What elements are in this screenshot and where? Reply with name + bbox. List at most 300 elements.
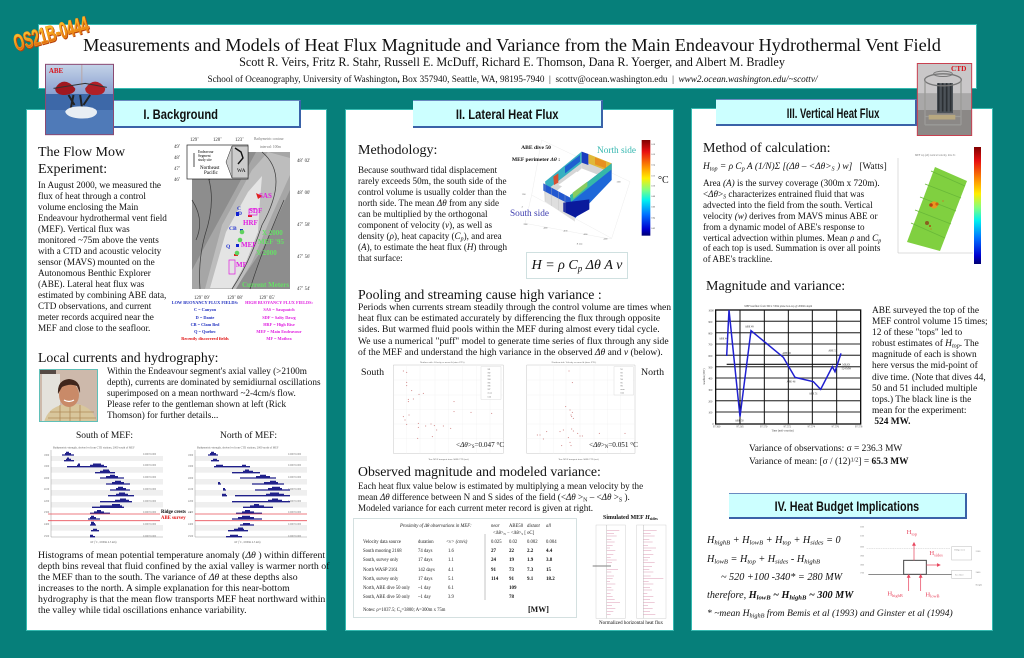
map axis labels: 129˚ 05' [259,295,275,301]
chart: depth histograms south and north: 2400 [44,523,50,526]
table: heat flux estimates [353,518,577,618]
text: flow mow description: meter records acquired near the [38,312,154,322]
text: histograms description: depth bins reveal that fluid confined by the axial valley is warmer north of [38,561,329,572]
map axis labels [174,137,310,301]
table: heat flux estimates: Proximity of Δθ observations in MEF: [399,524,472,529]
text: method description: <Δθ>S characterizes entrained fluid that was [703,189,864,200]
chart: scatter plots south and north [393,361,636,461]
text: method description: velocity (w) derives from MAVS minus ABE or [703,211,877,221]
chart: heat flux by dive: ABE 50 [735,419,744,422]
legend: vent field names: D = Dante [196,315,214,320]
text: magnitude description: ABE surveyed the top of the [872,306,979,316]
chart: scatter plots south and north: True MVE transport from ABM/CTD (m/s) [428,458,469,461]
chart: depth histograms south and north: 0.000±0.000 [143,488,157,491]
map inset: Northwest Pacific: Segment [198,154,211,158]
map: Endeavour segment bathymetry [174,137,310,301]
chart: 3D perimeter temperature: 3900 [523,224,527,226]
text: method description: advected into the field from the south. Vertical [703,200,873,210]
formula box: lateral heat flux [526,252,628,279]
diagram: heat budget schematic: 2200 [860,527,864,529]
text: histograms description: increases to the north. A simple explanation for this near-bottom [38,583,290,594]
table: heat flux estimates: 109 [509,586,517,591]
chart: 3D perimeter temperature: 4200 [583,234,587,236]
table: heat flux estimates: 0.002 [527,540,538,545]
heading: simulated MEF H sides: Simulated MEF Hsides [603,515,658,521]
text: flow mow description: (MEF). Vertical flux was [38,224,130,234]
text: magnitude description [872,306,988,427]
text: magnitude description: 12 of these "tops" led to [872,328,962,338]
legend: vent field names: Recently discovered fields [181,336,229,341]
legend: vent field names: HRF = High Rise [263,322,295,327]
table: heat flux estimates: 91 [509,577,514,582]
chart: depth histograms south and north: 1800 [188,454,194,457]
table: heat flux estimates: 74 days [418,549,433,554]
chart: heat flux by dive: 600 [708,355,713,358]
map inset: Northwest Pacific: Pacific [204,171,219,176]
flux labels: sides [934,552,943,557]
legend: vent field names: MF = Mothra [266,336,292,341]
table: heat flux estimates: South, ABE dive 50 only [363,595,411,600]
table: heat flux estimates: North WASP 2161 [363,568,399,573]
text: flow mow description: Endeavour hydrothermal vent field [38,213,167,223]
chart: heat flux by dive: Time (mid- yearday) [772,430,794,433]
table: heat flux estimates: 1.6 [448,549,455,554]
text: flow mow description: CTD observations, and current [38,301,151,311]
text: flow mow description: monitored ~75m above the vents [38,235,159,245]
map axis labels: 129˚ [190,137,199,143]
table: heat flux estimates: 142 days [418,568,435,573]
text: magnitude description: robust estimates of Htop. The [872,339,979,350]
chart: depth histograms south and north: 0.000±0.000 [288,535,302,538]
diagram: heat budget schematic: 2000 [860,546,864,548]
table: heat flux estimates: 73 [509,568,514,573]
table: heat flux estimates: 91 [491,568,496,573]
table: heat flux estimates: 15 [546,568,552,573]
table: heat flux estimates: 78 [509,595,514,600]
map: Endeavour segment bathymetry: MEF '95 [258,238,284,246]
table: heat flux estimates: 9.1 [527,577,534,582]
text: methodology description: can be multiplied by the orthogonal [358,209,488,219]
table: heat flux estimates: 3.9 [448,595,455,600]
map: Endeavour segment bathymetry: CB [229,226,237,232]
chart: heat flux by dive: 97.572 [784,426,792,429]
chart: heat flux by dive: 200 [708,400,713,403]
chart: depth histograms south and north: 0.000±0.000 [288,488,302,491]
text: methodology description: density (ρ), heat capacity (Cp), and area [358,231,502,242]
chart: heat flux by dive: 524 MW [842,368,852,371]
chart: depth histograms south and north: 1800 [44,454,50,457]
photo: CTD rosette: CTD [951,64,966,73]
map labels: vent fields: SDF [249,207,262,215]
chart: 3D perimeter temperature: 1700 [522,194,526,196]
formula: numeric estimate: ~ 520 +100 -340* = 280 MW [721,572,842,583]
legend: vent field names: SAS = Sasquatch [263,307,295,312]
table: heat flux estimates: [MW] [528,605,549,614]
map axis labels: 48˚ [174,155,181,161]
map axis labels: 129˚ 08' [227,295,243,301]
text: magnitude description: 50 and 51 included multiple [872,384,977,394]
chart: 3D perimeter temperature: 0.10 [651,186,655,188]
text: methodology description: control volume is usually colder than the [358,187,506,197]
chart: heat flux by dive: ABE 53 [828,350,838,353]
chart: depth histograms south and north: 2000 [188,477,194,480]
table: heat flux estimates: South, survey only [363,558,399,563]
chart: heat flux by dive: MEAN [842,363,850,366]
map axis labels: 49˚ [174,144,181,150]
map: Endeavour segment bathymetry: C [237,206,241,212]
chart: depth histograms south and north: 2400 [188,523,194,526]
heading: III. Vertical Heat Flux [716,99,917,126]
map axis labels: 129˚ 09' [194,295,210,301]
label: south of MEF: South of MEF: [76,431,133,441]
chart: depth histograms south and north: 0.000±0.000 [288,464,302,467]
chart: heat flux by dive: 97.576 [832,426,840,429]
text: flow mow description: volume enclosing the Main [38,202,138,212]
table: heat flux estimates: 17 days [418,577,433,582]
photo: CTD rosette [916,63,972,136]
label: North: North [641,367,664,378]
text: magnitude description: dive time. (Note that dives 44, [872,373,986,383]
heading: local currents: Local currents and hydrography: [38,350,218,365]
map axis labels: 47˚ 54' [297,286,310,292]
table: heat flux estimates: ~1 day [418,595,431,600]
chart: heat flux by dive: 97.565 [736,426,744,429]
chart: depth histograms south and north: 0.000±0.000 [288,511,302,514]
table: heat flux estimates: − <Δθ> [506,531,522,536]
chart: scatter plots south and north: M1 [488,369,490,371]
diagram: heat budget schematic: 1900 [860,556,864,558]
flux labels: H [929,550,934,557]
chart: simulated flux time series [592,524,666,618]
chart: heat flux by dive: ABE 49 [745,325,754,328]
heading: magnitude and variance: Magnitude and variance: [706,279,845,294]
arrows: fluxes [907,543,940,591]
formula: vertical heat flux: Htop = ρ Cp A (1/N)Σ [(Δθ – <Δθ>S ) w] [Watts] [703,162,887,173]
text: histograms description: hydrography is that the mean flow transports MEF heat northward within [38,594,325,605]
legend: vent field names [172,300,313,341]
table: heat flux estimates: p [400,609,402,613]
chart: scatter plots south and north: N1 [620,369,623,371]
photo: Rick Thomson portrait [39,369,98,422]
table: heat flux estimates: [ oC] [523,531,535,536]
chart: scatter plots south and north: M2 [488,372,490,374]
map labels: vent fields: MEF [241,241,257,249]
chart: scatter plots south and north: total [488,396,492,398]
map: Endeavour segment bathymetry: Q [226,244,231,250]
chart: heat flux by dive: ABE 45 [782,352,792,355]
legend: vent field names: CB = Clam Bed [191,322,219,327]
heading: flow mow experiment [38,145,126,177]
chart: heat flux by dive: 100 [708,412,713,415]
chart: scatter plots south and north: Northern side: Velocity vs mean ∆t (since ETA) [552,361,596,364]
chart: 3D perimeter temperature: 0.14 [651,165,655,167]
text: local currents description: Please refer to the gentleman shown at left (Rick [107,399,286,409]
chart: heat flux by dive: 0 [712,423,714,426]
text: pooling description: sides. But warmed fluid pools within the MEF during almost every tidal cycle. [358,324,660,335]
text: flow mow description: Autonomous Benthic Explorer [38,268,151,278]
text: method description: from a dynamic model of ABE's response to [703,222,865,232]
text: pooling description: of the MEF and understand the high variance in the observed Δθ and v (below). [358,347,663,358]
table: heat flux estimates: 22 [509,549,514,554]
chart: scatter plots south and north: True MVE transport from ABM/CTD (m/s) [558,458,599,461]
map inset: Northwest Pacific: Northeast [200,166,220,171]
heading: IV. Heat Budget Implications: IV. Heat Budget Implications [775,498,919,514]
chart: heat flux by dive: 400 [708,378,713,381]
label: north of MEF: North of MEF: [220,431,277,441]
text: magnitude description: here versus the mid-point of [872,361,978,371]
table: heat flux estimates: 0.004 [546,540,557,545]
chart: heat flux by dive: 1000 [708,310,714,313]
map: Endeavour segment bathymetry: Current Meters [242,281,289,289]
formula: low buoyancy flux: HlowB = Htop + Hsides - HhighB [707,554,820,566]
map: Endeavour segment bathymetry: D [238,211,242,217]
chart: 3D perimeter temperature [522,140,655,245]
chart: depth histograms south and north: 0.000±0.000 [143,500,157,503]
text: histograms description: Histograms of mean potential temperature anomaly (Δθ ) within different [38,550,325,561]
chart: scatter plots south and north: Northern side: Velocity vs mean ∆t (since ETA) [420,361,465,364]
heading: pooling and streaming: Pooling and streaming cause high variance : [358,287,602,302]
authors: Scott R. Veirs, Fritz R. Stahr, Russell E. McDuff, Richard E. Thomson, Dana R. Yoerger, and Albert M. Bradley [239,55,785,69]
heading: observed magnitude: Observed magnitude and modeled variance: [358,464,601,479]
map axis labels: Bathymetric contour [254,137,284,141]
chart: 3D perimeter temperature: 3300 [617,182,621,184]
table: heat flux estimates: 1.1 [448,558,455,563]
chart: heat flux by dive: ABE 46 [787,381,796,384]
table: heat flux estimates: 5.1 [448,577,455,582]
chart: depth histograms south and north: 0.000±0.000 [143,476,157,479]
chart: 3D perimeter temperature: 4100 [563,231,567,233]
flux labels: top [911,531,917,536]
table: heat flux estimates: =3800; A=300m x 75m [401,608,446,613]
table: heat flux estimates: North, survey only [363,577,399,582]
text: methodology description [358,165,507,263]
text: local currents description: depth), currents are dominated by semidiurnal oscillations [107,377,321,387]
chart: 3D perimeter temperature: 0.02 [651,228,655,230]
table: heat flux estimates: N [504,532,507,536]
chart: scatter plots south and north: N3 [620,376,623,378]
map inset: Northwest Pacific [187,145,248,179]
text: flow mow description: with a CTD and acoustic velocity [38,246,161,256]
map labels: vent fields [236,192,272,269]
map labels: vent fields: MF [236,261,247,269]
map axis labels: 123˚ [235,137,244,143]
table: heat flux estimates: 27 [491,549,496,554]
chart: depth histograms south and north: 2300 [44,511,50,514]
text: methodology description: Because southward tidal displacement [358,165,497,175]
chart: 3D perimeter temperature: 0.12 [651,175,655,177]
map labels: vent fields: HRF [243,219,258,227]
text: magnitude description: magnitude of each is shown [872,350,977,360]
chart: heat flux by dive: ABE 44 [719,337,728,340]
text: method description: vertical advection within plumes. Mean ρ and Cp [703,233,881,244]
text: observed magnitude description: Each heat flux value below is estimated by multiplying a mean velocity by the [358,481,643,491]
map axis labels: interval: 100m [260,145,281,149]
text: histograms description [38,550,330,616]
text: magnitude description: 524 MW. [874,417,910,427]
text: observed magnitude description: Modeled variance for each current meter record is given at right. [358,503,593,513]
chart: depth histograms south and north: 0.000±0.000 [288,476,302,479]
text: flow mow description: sensor (MAVS) mounted on the [38,257,155,267]
table: heat flux estimates: <v> (cm/s) [446,540,468,545]
text: methodology description: component of velocity (v), as well as [358,220,492,230]
annotation: ridge crests and ABE survey: ABE survey [161,516,186,521]
map axis labels: 128˚ [213,137,222,143]
heading: flow mow experiment: The Flow Mow [38,145,125,160]
label: south side: South side [510,209,549,219]
abstract number badge: OS21B-0444 [11,12,92,57]
text: magnitude description: tops.) The black line is the [872,395,971,405]
table: heat flux estimates: near [491,524,500,529]
legend: vent field names: SDF = Salty Dawg [262,315,296,320]
chart: heat flux by dive: 97.570 [760,426,768,429]
formula: heat budget: HhighB + HlowB + Htop + Hsides = 0 [707,535,841,547]
map labels: vent fields: SAS [259,192,272,200]
map inset: Northwest Pacific: study site [198,158,212,162]
histogram bars: north [208,452,290,537]
photo: ABE vehicle [45,64,114,136]
table: heat flux estimates: Velocity data source [363,540,401,545]
chart: scatter plots south and north: total [620,392,624,394]
text: variance of observations [749,444,909,467]
text: methodology description: that surface: [358,253,403,263]
text: magnitude description: mean for the experiment: [872,406,966,416]
map axis labels: 47˚ 58' [297,222,310,228]
flux labels [887,529,943,599]
diagram: heat budget schematic: 2400 [976,571,981,574]
poster title: Measurements and Models of Heat Flux Magnitude and Variance from the Main Endeavour Hydrothermal Vent Field [83,35,941,55]
chart: depth histograms south and north: 0.000±0.000 [143,523,157,526]
diagram: heat budget schematic: Sea floor [955,573,964,576]
chart: heat flux by dive: heatflux (MW) [703,369,706,385]
histogram bars: south [62,452,134,537]
text: observed magnitude description [358,481,643,513]
flux labels: H [887,591,892,598]
diagram: heat budget schematic: 1700 [860,573,864,575]
text: flow mow description: (ABE). Lateral heat flux was [38,279,144,289]
colorbar [642,140,650,236]
chart: depth histograms south and north: 1900 [188,465,194,468]
chart: scatter plots south and north: N5 [620,382,623,384]
table: heat flux estimates: 6.1 [448,586,455,591]
table: heat flux estimates: 4.1 [448,568,455,573]
chart title: ABE dive 50 [512,145,560,163]
table: heat flux estimates: 18.2 [546,577,555,582]
chart: heat flux by dive [702,304,863,433]
text: magnitude description: MEF control volume 15 times; [872,317,988,327]
panel: lateral heat flux [345,109,674,631]
map inset: Northwest Pacific: Endeavour [198,150,214,154]
abstract number badge: OS21B-0444 [11,11,92,56]
table: heat flux estimates: distant [527,524,540,529]
annotation: south mean temperature: <Δθ>S=0.047 °C [456,441,504,450]
text: local currents description: Within the Endeavour segment's axial valley (>2100m [107,366,307,376]
text: method description: of each top is used. Summation is over all points [703,243,880,253]
text: methodology description: (A), to estimate the heat flux (H) through [358,242,507,252]
text: observed magnitude description: mean Δθ difference between N and S sides of the field (<Δθ >N – <Δθ >S ). [358,492,630,504]
chart: 3D perimeter temperature: X (m) [577,242,583,245]
text: pooling description: heat flux can be estimated accurately by differencing the flux through opposite [358,313,660,324]
legend: vent field names: LOW BUOYANCY FLUX FIELDS: [172,300,238,305]
diagram: heat budget schematic: 2100 [976,550,981,553]
map axis labels: 48˚ 02' [297,158,310,164]
chart: scatter plots south and north: M3 [488,376,490,378]
chart: 3D perimeter temperature: 0.08 [651,196,655,198]
chart: depth histograms south and north [44,446,307,544]
affiliation: School of Oceanography, University of Washington, Box 357940, Seattle, WA, 98195-7940 | scottv@ocean.washington.edu | www2.ocean.washington.edu/~scottv/ [207,74,818,84]
title panel [38,24,977,89]
text: pooling description: We use a numerical "puff" model to generate time series of flux through any side [358,336,669,347]
chart: heat flux by dive: 97.560 [713,426,721,429]
table: heat flux estimates: 24 [491,558,496,563]
text: local currents description: superimposed on a mean northward ~2-4cm/s flow. [107,388,296,398]
legend: vent field names: Q = Quebec [194,329,216,334]
chart title: ABE dive 50: MEF perimeter Δθ : [512,157,560,163]
table: heat flux estimates: <Δθ> [493,531,504,536]
chart: depth histograms south and north: 0.000±0.000 [143,464,157,467]
text: pooling description: Periods when currents stream steadily through the control volume are times when [358,302,671,313]
text: flow mow description: MEF and close to the seafloor. [38,323,150,333]
text: histograms description: the valley while tidal oscillations enhance variability. [38,605,247,616]
chart: 3D perimeter temperature: 4300 [603,238,607,240]
chart: depth histograms south and north: 0.000±0.000 [288,523,302,526]
chart: scatter plots south and north: M4 [488,379,490,381]
chart: heat flux by dive: 300 [708,389,713,392]
chart: depth histograms south and north: 0.000±0.000 [143,511,157,514]
chart: scatter plots south and north: M7 [488,389,490,391]
map inset: Northwest Pacific: WA [237,168,246,174]
heading: flow mow experiment: Experiment: [38,162,107,177]
chart: depth histograms south and north: ΔT (˚C, 1000m 4.5 km) [234,541,261,544]
chart: scatter plots south and north: M6 [488,386,490,388]
map axis labels: 46˚ [174,177,181,183]
text: method description [703,178,881,264]
heading: II. Lateral Heat Flux: II. Lateral Heat Flux [456,106,558,122]
map: Endeavour segment bathymetry: X 2000 [262,229,283,237]
table: heat flux estimates: S [521,532,523,536]
heading: I. Background [113,100,301,128]
text: histograms description: the MEF than to the south. The variance of Δθ at these depths also [38,572,298,583]
table: heat flux estimates: 1.9 [527,558,534,563]
table: heat flux estimates: ~1 day [418,586,431,591]
chart: depth histograms south and north: 0.000±0.000 [288,500,302,503]
map: Endeavour segment bathymetry: X 2000 [256,249,277,257]
table: heat flux estimates: ABE50 [509,524,524,529]
annotation: north mean temperature: <Δθ>N=0.051 °C [589,441,638,450]
table: heat flux estimates: duration [418,540,434,545]
chart: scatter plots south and north: N6 [620,386,623,388]
annotation: ridge crests and ABE survey [161,510,192,521]
conclusion: therefore: therefore, HlowB ~ HhighB ~ 300 MW [707,590,853,602]
map axis labels: 47˚ [174,166,181,172]
chart: scatter plots south and north: mean [488,392,492,394]
chart: depth histograms south and north: 0.000±0.000 [143,535,157,538]
map: vertical flux field [898,147,981,264]
map: vertical flux field: MEF top (all) vertical velocity, dive 51 [915,154,956,157]
chart: 3D perimeter temperature: 0.18 [651,144,655,146]
heading: IV. Heat Budget Implications [729,493,967,519]
chart: depth histograms south and north: 2500 [44,535,50,538]
text: methodology description: rarely exceeds 50m, the south side of the [358,176,506,186]
chart: 3D perimeter temperature: 0.04 [651,217,655,219]
text: method description: of ABE's trackline. [703,254,772,264]
chart: depth histograms south and north: Bathymetric-strength, derived vs from CTD stations, 2000 south of MEF [53,446,135,450]
chart: heat flux by dive: 97.574 [808,426,816,429]
chart: depth histograms south and north: 2300 [188,511,194,514]
axis label: normalized horizontal heat flux: Normalized horizontal heat flux [599,621,663,626]
text: variance of observations: Variance of mean: [σ / (12)1/2] = 65.3 MW [749,457,909,467]
diagram: heat budget schematic: 2100 [860,536,864,538]
table: heat flux estimates: 0.025 [491,540,502,545]
